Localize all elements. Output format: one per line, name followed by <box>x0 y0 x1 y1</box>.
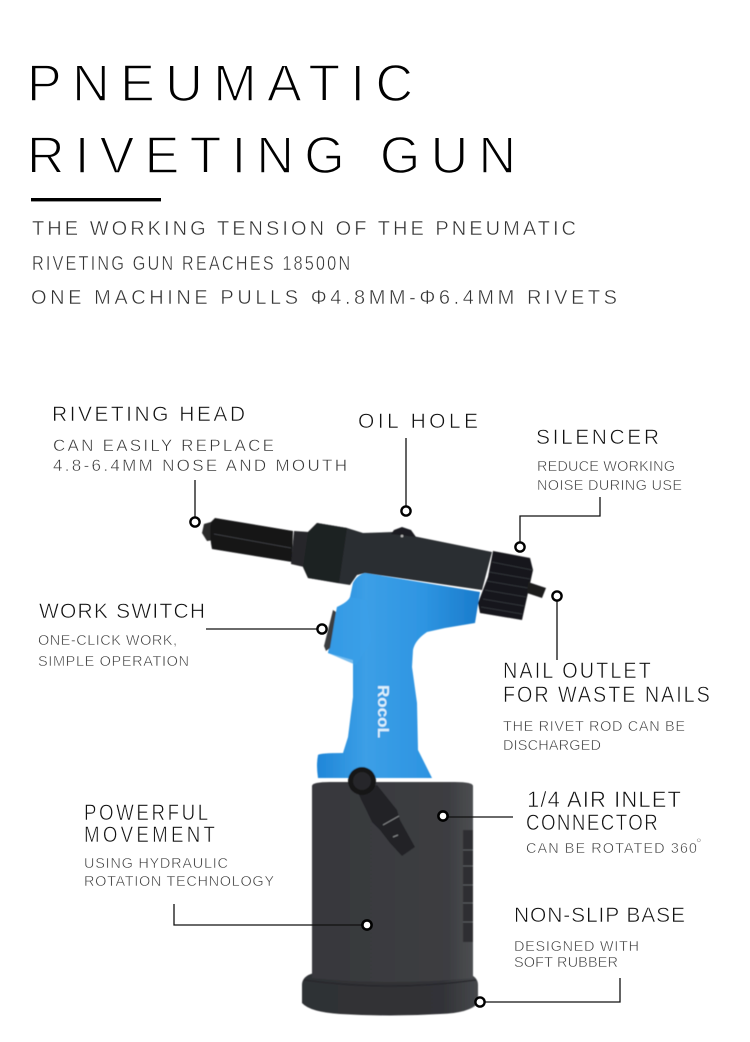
callout: non-slip base: SOFT RUBBER <box>514 955 618 971</box>
callout: powerful movement: POWERFUL <box>84 802 208 825</box>
intro text block: THE WORKING TENSION OF THE PNEUMATIC <box>32 218 576 240</box>
gun cylinder <box>312 782 473 982</box>
title: PNEUMATIC <box>27 55 413 113</box>
nail outlet <box>527 582 546 598</box>
callout: oil hole: OIL HOLE <box>358 410 478 433</box>
air connector hose <box>358 785 415 856</box>
end cap ribs <box>481 562 532 614</box>
callout: work switch: ONE-CLICK WORK, <box>38 633 177 649</box>
hex nut <box>291 531 309 567</box>
callout: air inlet connector: 1/4 AIR INLET <box>527 787 681 812</box>
callout: work switch <box>38 600 327 670</box>
callout: non-slip base: NON-SLIP BASE <box>514 904 685 927</box>
connector highlight <box>383 816 399 837</box>
handle logo text: RocoL <box>374 685 391 738</box>
callout: nail outlet <box>503 591 710 754</box>
swivel pivot <box>348 767 376 795</box>
callout: nail outlet: FOR WASTE NAILS <box>503 683 710 707</box>
end cap <box>478 551 533 620</box>
gun base ring <box>302 973 478 1016</box>
intro text block: RIVETING GUN REACHES 18500N <box>32 251 350 274</box>
callout: oil hole <box>358 410 478 516</box>
title: RIVETING GUN <box>27 127 516 185</box>
callout: powerful movement <box>84 802 372 930</box>
callout: nail outlet: DISCHARGED <box>503 738 601 754</box>
handle shading <box>328 597 372 665</box>
intro text block <box>31 218 617 309</box>
cylinder ring seam <box>304 980 476 986</box>
callout: air inlet connector <box>438 787 702 857</box>
barrel highlight <box>214 534 291 548</box>
knurled collar <box>303 523 347 583</box>
work switch button <box>324 610 336 651</box>
callout: riveting head: CAN EASILY REPLACE <box>53 436 274 455</box>
callout: silencer: SILENCER <box>536 426 659 449</box>
callout: riveting head: 4.8-6.4MM NOSE AND MOUTH <box>53 456 347 475</box>
product: pneumatic riveting gun <box>202 518 546 1016</box>
blue handle <box>317 573 480 778</box>
rating label <box>463 830 473 942</box>
callout: silencer: REDUCE WORKING <box>537 459 675 475</box>
callout: non-slip base <box>475 904 685 1007</box>
callout: powerful movement: MOVEMENT <box>84 824 215 847</box>
swivel cap <box>353 772 371 790</box>
gun body <box>303 523 492 590</box>
oil hole plug <box>391 527 416 537</box>
nose tip <box>202 522 214 541</box>
callout: powerful movement: USING HYDRAULIC <box>84 856 228 872</box>
intro text block: ONE MACHINE PULLS Φ4.8MM-Φ6.4MM RIVETS <box>31 287 617 309</box>
title underline bar <box>31 198 161 201</box>
callout: riveting head <box>52 403 347 527</box>
callout: nail outlet: NAIL OUTLET <box>503 659 651 683</box>
barrel <box>210 518 293 562</box>
callout: air inlet connector: ° <box>696 835 702 851</box>
callout: silencer: NOISE DURING USE <box>537 478 682 494</box>
callout: riveting head: RIVETING HEAD <box>52 403 245 426</box>
callout: air inlet connector: CAN BE ROTATED 360 <box>526 841 697 857</box>
callout: nail outlet: THE RIVET ROD CAN BE <box>503 719 685 735</box>
callout: silencer <box>515 426 682 552</box>
callout: work switch: WORK SWITCH <box>39 600 205 623</box>
callout: air inlet connector: CONNECTOR <box>526 812 658 835</box>
callout: non-slip base: DESIGNED WITH <box>514 939 639 955</box>
callout: powerful movement: ROTATION TECHNOLOGY <box>84 874 274 890</box>
callout: work switch: SIMPLE OPERATION <box>38 654 189 670</box>
title <box>27 55 516 185</box>
